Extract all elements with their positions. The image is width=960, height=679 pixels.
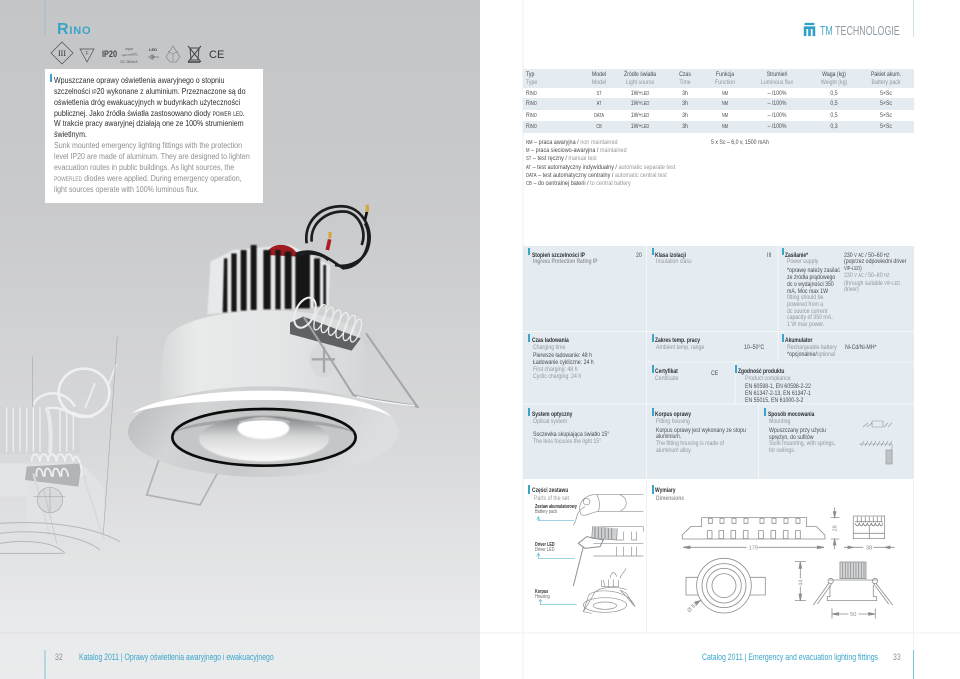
cell: power supply: vip-led)	[844, 265, 862, 272]
table header: Model	[592, 79, 606, 86]
table: product variants	[523, 69, 914, 133]
row: Rino ST: nm	[722, 90, 728, 97]
cell: power supply: ze źródła prądowego	[787, 274, 835, 281]
cell: charging time: Czas ładowania	[532, 337, 569, 344]
description text: szczelności ip20 wykonane z aluminium. Przeznaczone są do	[54, 86, 245, 96]
row: Rino AT: Rino	[526, 100, 537, 107]
table header: Funkcja	[716, 71, 734, 78]
icon: CE mark	[209, 49, 224, 61]
plan view	[686, 558, 765, 613]
table header: Function	[715, 79, 735, 86]
cell: insulation class: Klasa izolacji	[655, 252, 686, 259]
icon: input DC 350 mA: DC 350mA	[120, 60, 138, 64]
cell: charging time: Cyclic charging: 24 h	[533, 373, 581, 380]
logo mark	[804, 22, 816, 36]
icon: protection class III: III	[58, 49, 66, 58]
cell: fitting housing	[652, 408, 746, 454]
row: Rino CB: 3h	[682, 123, 688, 130]
row: Rino ST: – /100%	[767, 90, 787, 97]
dimension 44	[795, 562, 806, 601]
row: Rino DATA: Rino	[526, 112, 537, 119]
cell: fitting housing: Korpus oprawy jest wykonany ze stopu	[656, 427, 746, 434]
panel: parts of the set: Parts of the set	[534, 495, 569, 502]
cell: power supply: dc source current	[787, 308, 827, 315]
description text: evacuation routes in public buildings. As light sources, the	[54, 162, 234, 172]
description text: świetlnym.	[54, 129, 87, 139]
panel: dimensions: Wymiary	[655, 487, 676, 494]
row: Rino DATA: data	[594, 112, 604, 119]
mounting screw	[309, 343, 337, 377]
cell: product compliance	[735, 365, 811, 404]
table header: Time	[679, 79, 691, 86]
dimension 38: 38	[866, 545, 872, 551]
description text: Wpuszczane oprawy oświetlenia awaryjnego o stopniu	[54, 75, 224, 85]
panel: parts of the set: Driver LED	[535, 547, 555, 553]
title: Rino	[57, 21, 91, 38]
table header	[523, 69, 914, 88]
cell: optical system: System optyczny	[532, 411, 572, 418]
ghost line drawing of lamp rear	[0, 336, 120, 554]
icon: input DC 350 mA: Input	[125, 47, 133, 51]
table header: Battery pack	[872, 79, 900, 86]
row: Rino AT: at	[597, 100, 601, 107]
cell: ingress protection	[528, 248, 642, 265]
dimension 50: 50	[850, 612, 856, 618]
cell: ingress protection: Ingress Protection Rating IP	[533, 258, 597, 265]
cell: battery: *opcjonalnie/optional	[787, 351, 835, 358]
cell: battery: Rechargeable battery	[787, 344, 837, 351]
page number right: 33	[893, 652, 901, 662]
row: Rino CB: nm	[722, 123, 728, 130]
cell: power supply: dc o wydajności 350	[787, 281, 834, 288]
cell: power supply: Power supply	[787, 258, 818, 265]
row: Rino ST	[526, 90, 892, 97]
row: Rino AT: 1W+led	[631, 100, 649, 107]
row: Rino CB: cb	[596, 123, 602, 130]
cell: power supply: Zasilanie*	[785, 252, 808, 259]
row: Rino ST: 1W+led	[631, 90, 649, 97]
panel: parts of the set	[528, 485, 644, 614]
icon: IP20 rating: IP20	[102, 49, 117, 59]
row: Rino ST: 0,5	[830, 90, 838, 97]
row: Rino CB	[523, 121, 914, 133]
cell: power supply: *oprawę należy zasilać	[787, 267, 840, 274]
cell: charging time: Ładowanie cykliczne: 24 h	[533, 359, 594, 366]
row: Rino AT: – /100%	[767, 100, 787, 107]
row: Rino CB: – /100%	[767, 123, 787, 130]
cell: power supply: 1 W max power.	[787, 321, 824, 328]
cell: insulation class	[652, 248, 771, 265]
cell: optical system: Optical system	[533, 418, 567, 425]
description text: publicznej. Jako źródła światła zastosowano diody power led.	[54, 108, 245, 118]
row: Rino CB: 5×Sc	[880, 123, 892, 130]
cell: fitting housing: Korpus oprawy	[655, 411, 691, 418]
panel: product description	[45, 69, 263, 203]
cell: battery: Ni-Cd/Ni-MH*	[845, 344, 876, 351]
lead wires	[297, 205, 370, 268]
certification icons row	[50, 42, 224, 64]
cell dividers	[523, 246, 914, 479]
dimension diameter 63: Ø 63	[686, 601, 699, 614]
table header: Czas	[679, 71, 691, 78]
row: Rino AT: 3h	[682, 100, 688, 107]
heat sink fins	[207, 245, 330, 314]
parts line drawing	[536, 494, 644, 614]
panel: dimensions: Dimensions	[656, 495, 684, 502]
table header: Weight (kg)	[821, 79, 847, 86]
cell: fitting housing: aluminum alloy.	[656, 447, 692, 454]
legend: abbreviations: cb – do centralnej baterii / to central battery	[526, 180, 631, 187]
cell: ambient temperature: 10–50°C	[744, 344, 764, 351]
side elevation	[682, 518, 825, 539]
row: Rino AT: 5×Sc	[880, 100, 892, 107]
icon: F mark triangle: F	[85, 51, 89, 57]
table header: Źródło światła	[624, 71, 656, 78]
row: Rino ST: Rino	[526, 90, 537, 97]
row: Rino CB: Rino	[526, 123, 537, 130]
row: Rino ST: st	[596, 90, 602, 97]
cell: product compliance: Product compliance	[745, 375, 791, 382]
cell: product compliance: EN 55015, EN 61000-3-2	[745, 397, 803, 404]
page number left: 32	[55, 652, 63, 662]
cell: power supply: mA, Moc max 1W	[787, 288, 828, 295]
cell: product compliance: EN 60598-1, EN 60598-2-22	[745, 383, 811, 390]
cell: product compliance: Zgodność produktu	[738, 368, 784, 375]
cell: charging time: First charging: 48 h	[533, 366, 578, 373]
dimension 50	[832, 608, 875, 619]
table header: Waga (kg)	[822, 71, 846, 78]
cell: ambient temperature: Zakres temp. pracy	[655, 337, 700, 344]
lamp body	[159, 311, 370, 400]
row: Rino DATA: – /100%	[767, 112, 787, 119]
row: Rino DATA: 0,5	[830, 112, 838, 119]
cell: optical system	[528, 408, 609, 445]
row: Rino AT	[523, 98, 914, 110]
front elevation	[813, 562, 893, 605]
row: Rino DATA: 5×Sc	[880, 112, 892, 119]
description text	[54, 75, 250, 194]
legend: abbreviations	[526, 139, 676, 187]
description text: powerled diodes were applied. During emergency operation,	[54, 173, 242, 183]
footer title right: Catalog 2011 | Emergency and evacuation lighting fittings	[702, 652, 878, 662]
cell: mounting	[764, 408, 892, 464]
cell: ingress protection: 20	[636, 252, 642, 259]
cell: battery: Akumulator	[785, 337, 812, 344]
icon: crossed-out bin	[188, 46, 201, 62]
cell: power supply	[782, 248, 906, 328]
cell: product compliance: EN 61347-2-13, EN 61347-1	[745, 390, 811, 397]
end elevation	[853, 516, 885, 539]
cell: certificate: Certyfikat	[655, 368, 678, 375]
cell: power supply: driver)	[844, 286, 859, 293]
cell: charging time: Pierwsze ładowanie: 48 h	[533, 352, 592, 359]
row: Rino DATA: 3h	[682, 112, 688, 119]
cell: mounting: sprężyn, do sufitów	[769, 434, 814, 441]
cell: fitting housing: Fitting housing	[656, 418, 690, 425]
table header: Typ	[526, 71, 534, 78]
cell: insulation class: Insulation class	[656, 258, 692, 265]
row: Rino CB: 0,3	[830, 123, 838, 130]
cell: mounting: Wpuszczany przy użyciu	[769, 427, 826, 434]
lower spring clip	[147, 458, 217, 505]
table header: Light source	[626, 79, 654, 86]
dimension drawings	[682, 507, 895, 619]
legend: abbreviations: m – praca sieciowo-awaryjna / maintained	[526, 147, 627, 154]
logo	[804, 22, 900, 38]
row: Rino ST: 5×Sc	[880, 90, 892, 97]
cell: optical system: Soczewka skupiająca światło 15°	[533, 431, 609, 438]
description text: light sources operate with 100% luminous flux.	[54, 184, 199, 194]
row: Rino DATA	[526, 112, 892, 119]
icon: CE mark: E	[217, 49, 224, 61]
dimension 28: 28	[833, 525, 839, 531]
icon: protection class III	[51, 42, 73, 64]
table header: Strumień	[767, 71, 787, 78]
description accent bar	[50, 74, 52, 82]
footer right	[702, 652, 901, 662]
dimension 179: 179	[749, 545, 758, 551]
panel: parts of the set: Driver LED	[535, 542, 555, 548]
cell: fitting housing: aluminium.	[656, 433, 681, 440]
cell: battery	[782, 334, 876, 358]
legend: abbreviations: data – test automatyczny centralny / automatic central test	[526, 172, 667, 179]
dimension 44: 44	[799, 580, 805, 586]
logo wordmark: TM TECHNOLOGIE	[820, 24, 900, 38]
product photo: recessed lamp	[128, 204, 420, 506]
table header: Luminous flux	[761, 79, 793, 86]
cell: power supply: (poprzez odpowiedni driver	[844, 258, 906, 265]
legend: abbreviations: at – test automatyczny indywidualny / automatic separate test	[526, 164, 675, 171]
legend: abbreviations: nm – praca awaryjna / non maintained	[526, 139, 618, 146]
description text: oświetlenia dróg ewakuacyjnych w budynkach użyteczności	[54, 97, 240, 107]
panel: parts of the set: Korpus	[535, 589, 548, 595]
icon: input DC 350 mA	[120, 47, 138, 64]
table header: Type	[526, 79, 537, 86]
cell: ambient temperature: Ambient temp. range	[656, 344, 704, 351]
cell: ingress protection: Stopień szczelności IP	[532, 252, 585, 259]
panel: parts of the set: Battery pack	[535, 509, 557, 515]
row: Rino AT: nm	[722, 100, 728, 107]
cell: insulation class: III	[767, 252, 771, 259]
cell: power supply: fitting should be	[787, 294, 823, 301]
cell: mounting: Sposób mocowania	[768, 411, 814, 418]
row: Rino DATA: 1W+led	[631, 112, 649, 119]
description text: level IP20 are made of aluminum. They are designed to lighten	[54, 151, 250, 161]
cell: certificate: Certificate	[655, 375, 678, 382]
icon: mounting diagrams	[859, 420, 892, 464]
panel: parts of the set: Housing	[535, 594, 550, 600]
cell: charging time: Charging time	[533, 344, 565, 351]
panel: parts of the set: Zestaw akumulatorowy	[535, 504, 577, 510]
panel: parts of the set: Części zestawu	[532, 487, 568, 494]
cell: ambient temperature	[652, 334, 764, 351]
table header: Model	[592, 71, 606, 78]
dimension 38	[844, 545, 895, 551]
row: Rino AT: 0,5	[830, 100, 838, 107]
cell: power supply: 230 v ac / 50–60 hz	[844, 272, 889, 279]
cell: power supply: powered from a	[787, 301, 823, 308]
cell: certificate: CE	[711, 370, 718, 377]
panel: dimensions	[652, 485, 895, 619]
cell: mounting: Sunk mounting, with springs,	[769, 440, 835, 447]
cell: power supply: 230 v ac / 50–60 hz	[844, 252, 889, 259]
legend: abbreviations: st – test ręczny / manual test	[526, 155, 597, 162]
torsion spring clip	[290, 294, 417, 407]
row: Rino ST: 3h	[682, 90, 688, 97]
icon: LED	[148, 47, 159, 60]
description text: Sunk mounted emergency lighting fittings with the protection	[54, 140, 242, 150]
footer title left: Katalog 2011 | Oprawy oświetlenia awaryjnego i ewakuacyjnego	[79, 652, 274, 662]
icon: recycling	[166, 46, 180, 62]
cell: power supply: (through suitable vip-led	[844, 280, 900, 287]
left page background	[0, 0, 480, 679]
description text: W trakcie pracy awaryjnej działają one ze 100% strumieniem	[54, 118, 244, 128]
cell: fitting housing: The fitting housing is made of	[656, 440, 724, 447]
cell: optical system: The lens focuses the light 15°	[533, 438, 601, 445]
cell: mounting: for ceilings.	[769, 447, 795, 454]
panel: specifications background	[523, 246, 914, 479]
table header: Pakiet akum.	[871, 71, 901, 78]
icon: CE mark: C	[209, 49, 217, 61]
row: Rino CB: 1W+led	[631, 123, 649, 130]
battery note: 5 x Sc – 6,0 v, 1500 mAh	[711, 139, 769, 146]
icon: F mark triangle	[80, 49, 94, 62]
row: Rino DATA: nm	[722, 112, 728, 119]
cell: certificate	[652, 365, 718, 382]
flange	[128, 386, 399, 477]
icon: LED: LED	[149, 47, 157, 52]
cell: charging time	[528, 334, 594, 380]
dimension 28	[831, 507, 839, 549]
cell: mounting: Mounting	[769, 418, 790, 425]
cell: power supply: capacity of 350 mA,	[787, 314, 833, 321]
footer left	[55, 652, 274, 662]
